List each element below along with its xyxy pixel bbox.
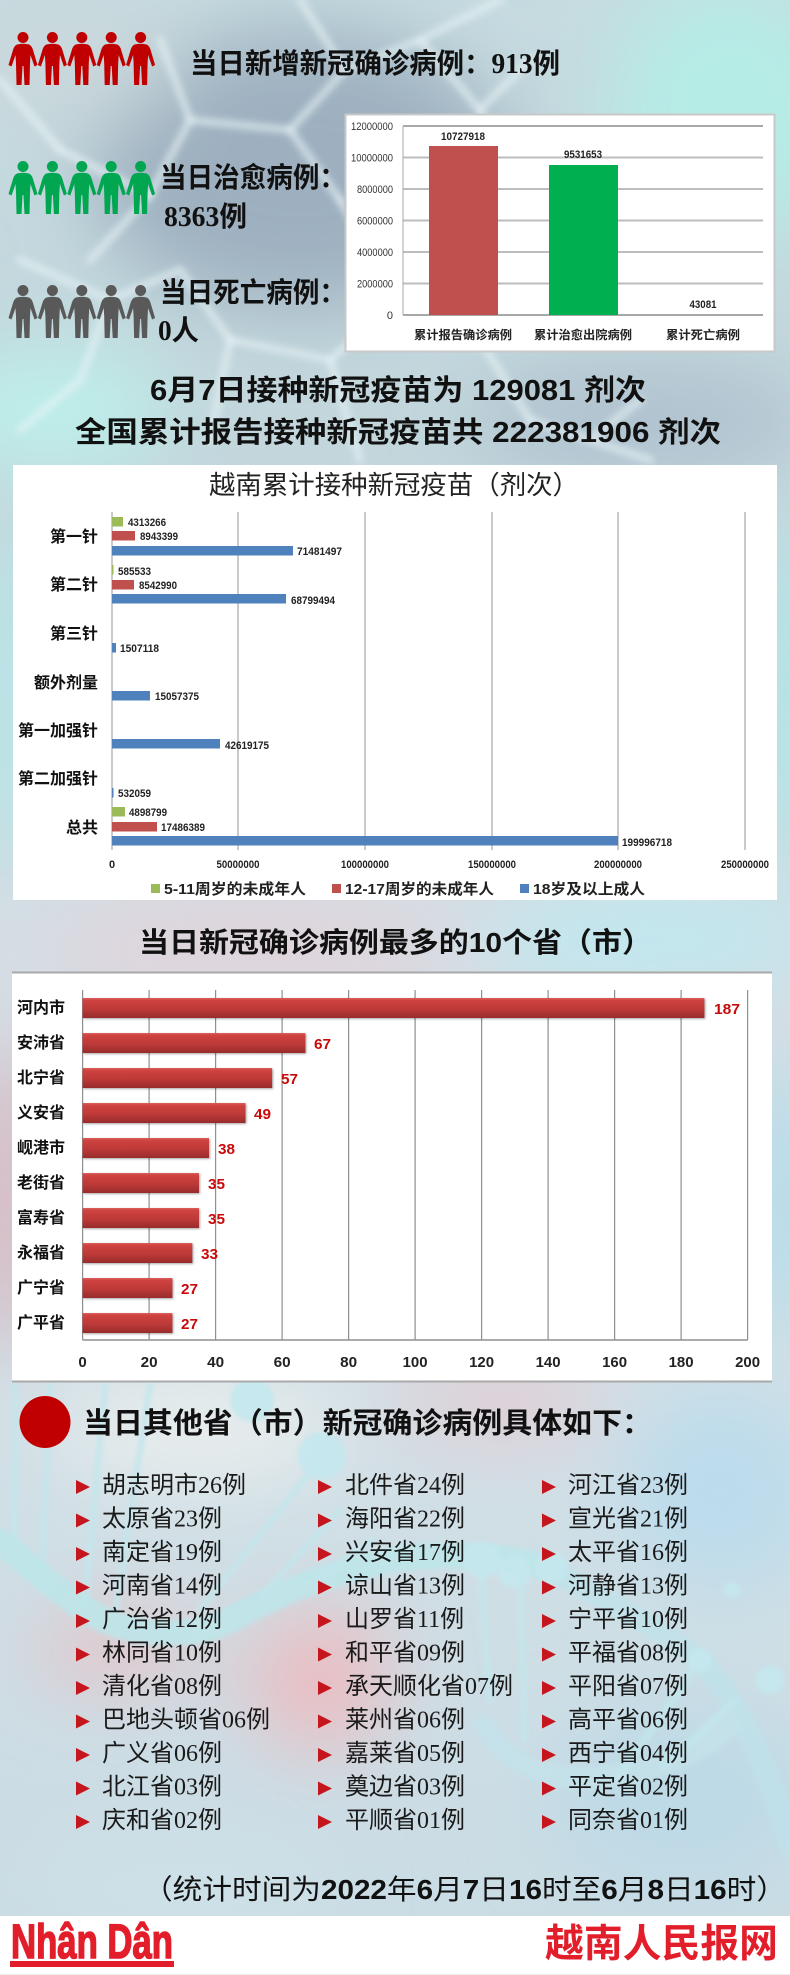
text: recovered cases: 当日治愈病例：: [160, 156, 346, 196]
panel: top 10 chart: 180: [669, 1354, 694, 1371]
panel: top 10 chart: 35: [208, 1211, 225, 1228]
chart: cumulative cases: 43081: [690, 299, 716, 311]
text: new cases: 当日新增新冠确诊病例：913例: [190, 48, 560, 80]
panel: top 10 chart: 27: [181, 1316, 198, 1333]
list: provinces column 2: 奠边省03例: [345, 1774, 465, 1800]
list: provinces column 1: 河南省14例: [102, 1572, 222, 1600]
chart: cumulative cases: 6000000: [357, 216, 393, 228]
text: death cases: [158, 271, 346, 347]
list: provinces column 2: 平顺省01例: [345, 1807, 465, 1834]
panel: vaccine chart: 15057375: [155, 691, 199, 703]
panel: vaccine chart: 8943399: [140, 531, 178, 543]
chart: cumulative cases: 10000000: [351, 152, 393, 164]
list: provinces column 2: 承天顺化省07例: [345, 1673, 513, 1700]
list: provinces column 1: 广治省12例: [102, 1606, 222, 1633]
list: provinces column 1: 广义省06例: [102, 1740, 222, 1767]
list: provinces column 2: [345, 1472, 513, 1834]
chart title: 越南累计接种新冠疫苗（剂次）: [209, 465, 579, 502]
list: provinces column 2: 和平省09例: [345, 1640, 465, 1666]
panel: top 10 chart: 57: [281, 1071, 298, 1088]
panel: vaccine chart: [13, 465, 777, 900]
icon: red people row: [8, 32, 155, 85]
panel: vaccine chart: 100000000: [341, 859, 389, 871]
panel: top 10 chart: 38: [218, 1141, 235, 1158]
chart: cumulative cases: 4000000: [357, 247, 393, 259]
list: provinces column 1: 巴地头顿省06例: [102, 1706, 270, 1734]
note: statistics period: （统计时间为 2022年6月7日16时至6月8日16时）: [143, 1874, 786, 1905]
panel: vaccine chart: 第一加强针: [18, 717, 98, 741]
list: provinces column 2: 莱州省06例: [345, 1706, 465, 1734]
list: provinces column 2: 海阳省22例: [345, 1506, 465, 1532]
chart: cumulative cases: 累计治愈出院病例: [534, 326, 632, 343]
panel: top 10 chart: 140: [536, 1354, 561, 1371]
list: provinces column 2: 山罗省11例: [345, 1606, 464, 1633]
panel: top 10 chart: 老街省: [17, 1169, 65, 1193]
panel: top 10 chart: 北宁省: [17, 1064, 65, 1088]
panel: vaccine chart: 第三针: [50, 620, 98, 644]
list: provinces column 3: 宁平省10例: [568, 1606, 688, 1633]
panel: top 10 chart: 广宁省: [17, 1274, 65, 1298]
chart: cumulative cases: [346, 114, 774, 352]
panel: top 10 chart: 岘港市: [17, 1134, 65, 1158]
list: provinces column 3: [568, 1472, 688, 1834]
list: provinces column 2: 嘉莱省05例: [345, 1740, 465, 1767]
panel: vaccine chart: 150000000: [468, 859, 516, 871]
chart: cumulative cases: 0: [387, 310, 393, 322]
panel: top 10 chart: 河内市: [17, 994, 65, 1018]
list: provinces column 1: 南定省19例: [102, 1539, 222, 1566]
panel: top 10 chart: 40: [207, 1354, 224, 1371]
list: provinces column 3: 宣光省21例: [568, 1506, 688, 1532]
panel: vaccine chart: 71481497: [297, 546, 342, 558]
panel: top 10 chart: 20: [141, 1354, 158, 1371]
legend: 18岁及以上成人: [533, 880, 645, 898]
arrow markers: [76, 1480, 556, 1829]
chart: cumulative cases: 12000000: [351, 121, 393, 133]
icon: red circle: [20, 1396, 70, 1448]
panel: top 10 chart: 80: [340, 1354, 357, 1371]
panel: top 10 chart: 49: [254, 1106, 271, 1123]
panel: vaccine chart: 4313266: [128, 517, 166, 529]
legend: 5-11周岁的未成年人: [164, 880, 306, 898]
list: provinces column 1: 庆和省02例: [102, 1807, 222, 1834]
panel: vaccine chart: 199996718: [622, 837, 672, 849]
chart: cumulative cases: 累计报告确诊病例: [414, 326, 512, 343]
panel: top 10 chart: 安沛省: [17, 1029, 65, 1053]
list: provinces column 3: 平阳省07例: [568, 1673, 688, 1700]
panel: vaccine chart: 42619175: [225, 740, 269, 752]
heading: top 10 provinces: 当日新冠确诊病例最多的10个省（市）: [139, 927, 652, 958]
list: provinces column 3: 平福省08例: [568, 1640, 688, 1666]
icon: green people row: [8, 161, 155, 214]
text: death cases: 当日死亡病例：: [160, 271, 346, 311]
heading: total vaccination: 全国累计报告接种新冠疫苗共 222381906 剂次: [75, 416, 721, 449]
panel: vaccine chart: 532059: [118, 788, 151, 800]
panel: vaccine chart: 8542990: [139, 580, 177, 592]
panel: top 10 chart: 120: [469, 1354, 494, 1371]
list: provinces column 3: 同奈省01例: [568, 1807, 688, 1834]
panel: top 10 chart: 35: [208, 1176, 225, 1193]
chart: cumulative cases: 9531653: [564, 149, 602, 161]
panel: top 10 chart: [12, 972, 772, 1382]
footer: [0, 1913, 790, 1975]
bar: recovered: [549, 165, 618, 315]
panel: vaccine chart: 总共: [66, 814, 98, 838]
chart: cumulative cases: 8000000: [357, 184, 393, 196]
panel: vaccine chart: 200000000: [594, 859, 642, 871]
panel: vaccine chart: 第一针: [50, 523, 98, 547]
panel: top 10 chart: 160: [602, 1354, 627, 1371]
panel: top 10 chart: 187: [714, 1001, 740, 1018]
panel: vaccine chart: 50000000: [216, 859, 260, 871]
logo: Nhan Dan: Nhân Dân: [11, 1916, 173, 1969]
bars: [83, 998, 704, 1333]
list: provinces column 1: 林同省10例: [102, 1640, 222, 1666]
list: provinces column 1: 北江省03例: [102, 1774, 222, 1800]
panel: top 10 chart: 义安省: [17, 1099, 65, 1123]
heading: other provinces: 当日其他省（市）新冠确诊病例具体如下：: [83, 1400, 652, 1442]
list: provinces column 2: 谅山省13例: [345, 1572, 465, 1600]
list: provinces column 3: 西宁省04例: [568, 1740, 688, 1767]
list: provinces column 3: 太平省16例: [568, 1539, 688, 1566]
icon: grey people row: [8, 285, 155, 338]
panel: top 10 chart: 33: [201, 1246, 218, 1263]
list: provinces column 1: [102, 1472, 270, 1834]
list: provinces column 3: 平定省02例: [568, 1774, 688, 1800]
panel: vaccine chart: 68799494: [291, 595, 336, 607]
panel: top 10 chart: 富寿省: [17, 1204, 65, 1228]
brand name: 越南人民报网: [545, 1913, 778, 1969]
text: death cases: 0人: [158, 315, 199, 347]
panel: top 10 chart: 0: [78, 1354, 87, 1371]
list: provinces column 2: 兴安省17例: [345, 1539, 465, 1566]
panel: vaccine chart: 额外剂量: [34, 669, 98, 693]
chart: cumulative cases: 10727918: [441, 131, 485, 143]
panel: top 10 chart: 60: [274, 1354, 291, 1371]
panel: vaccine chart: 17486389: [161, 822, 205, 834]
chart: cumulative cases: 2000000: [357, 278, 393, 290]
list: provinces column 1: 太原省23例: [102, 1506, 222, 1532]
list: provinces column 3: 河静省13例: [568, 1572, 688, 1600]
list: provinces column 1: 胡志明市26例: [102, 1472, 246, 1499]
panel: top 10 chart: 200: [735, 1354, 760, 1371]
list: provinces column 3: 河江省23例: [568, 1472, 688, 1499]
panel: vaccine chart: 1507118: [120, 643, 159, 655]
list: provinces column 1: 清化省08例: [102, 1673, 222, 1700]
panel: vaccine chart: 4898799: [129, 807, 167, 819]
panel: top 10 chart: 广平省: [17, 1309, 65, 1333]
legend: [151, 880, 645, 898]
panel: vaccine chart: 0: [109, 859, 115, 871]
list: provinces column 2: 北件省24例: [345, 1472, 465, 1499]
bar: confirmed: [429, 146, 498, 315]
panel: vaccine chart: 585533: [118, 566, 151, 578]
heading: daily vaccination: 6月7日接种新冠疫苗为 129081 剂次: [150, 374, 646, 407]
panel: top 10 chart: 67: [314, 1036, 331, 1053]
text: recovered cases: [160, 156, 346, 233]
panel: vaccine chart: 第二加强针: [18, 765, 98, 789]
chart: cumulative cases: 累计死亡病例: [666, 326, 740, 343]
panel: vaccine chart: 250000000: [721, 859, 769, 871]
text: recovered cases: 8363例: [164, 201, 247, 233]
panel: top 10 chart: 永福省: [17, 1239, 65, 1263]
list: provinces column 3: 高平省06例: [568, 1706, 688, 1734]
panel: top 10 chart: 27: [181, 1281, 198, 1298]
panel: vaccine chart: 第二针: [50, 571, 98, 595]
legend: 12-17周岁的未成年人: [345, 880, 494, 898]
panel: top 10 chart: 100: [403, 1354, 428, 1371]
